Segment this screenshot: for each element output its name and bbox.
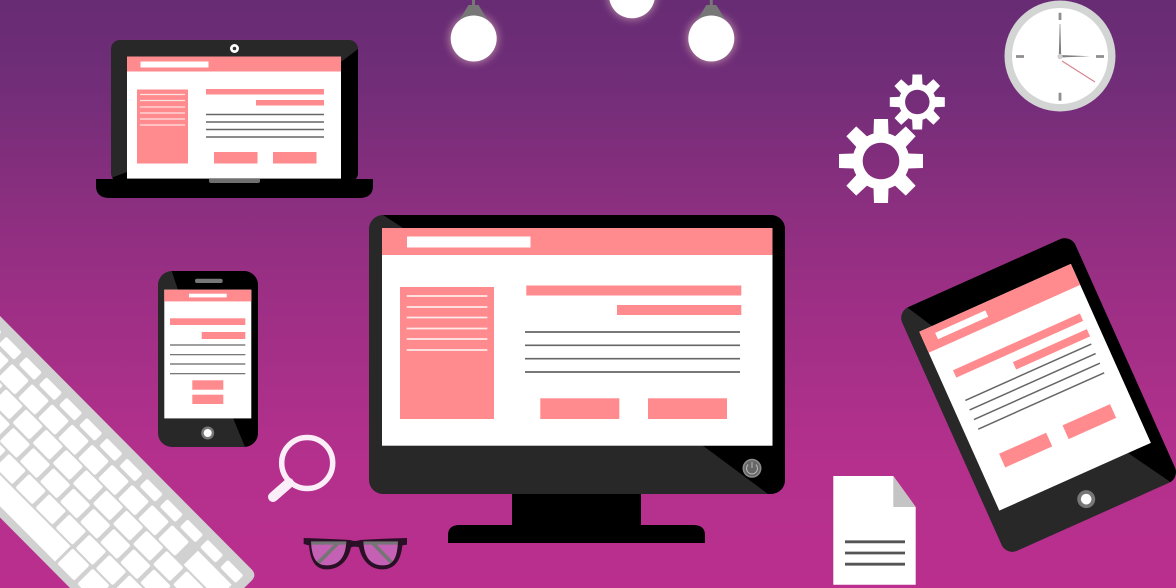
monitor stand [448, 490, 705, 543]
tablet body [897, 234, 1176, 556]
desktop monitor [369, 215, 785, 543]
monitor buttons [540, 398, 727, 419]
monitor screen [382, 228, 772, 446]
icon: magnifying glass [273, 438, 333, 497]
tablet [897, 234, 1176, 556]
laptop base [96, 179, 373, 198]
keyboard [0, 316, 254, 588]
laptop camera [230, 44, 239, 53]
tablet home button [1074, 487, 1098, 511]
light: left bulb [449, 0, 498, 63]
tablet screen [919, 264, 1151, 511]
laptop notch [209, 179, 260, 183]
smartphone [158, 271, 258, 447]
icon: large gear [839, 119, 923, 203]
monitor content bars [526, 286, 741, 315]
monitor text lines [525, 332, 740, 372]
clock [1004, 0, 1116, 112]
laptop lid [111, 40, 358, 182]
phone home button [201, 426, 214, 440]
light: centre bulb [608, 0, 656, 20]
keyboard body [0, 316, 254, 588]
laptop screen [127, 56, 341, 178]
laptop [96, 40, 373, 198]
phone speaker [195, 279, 223, 283]
document [833, 476, 916, 585]
icon: glasses [304, 538, 407, 569]
icon: small gear [890, 74, 945, 130]
pendant lights [449, 0, 736, 63]
monitor sidebar [400, 287, 494, 419]
phone body [158, 271, 258, 447]
keyboard keys [0, 330, 244, 588]
light: right bulb [687, 0, 736, 63]
icon: power button [742, 459, 762, 478]
monitor body [369, 215, 785, 494]
phone screen [164, 290, 251, 418]
